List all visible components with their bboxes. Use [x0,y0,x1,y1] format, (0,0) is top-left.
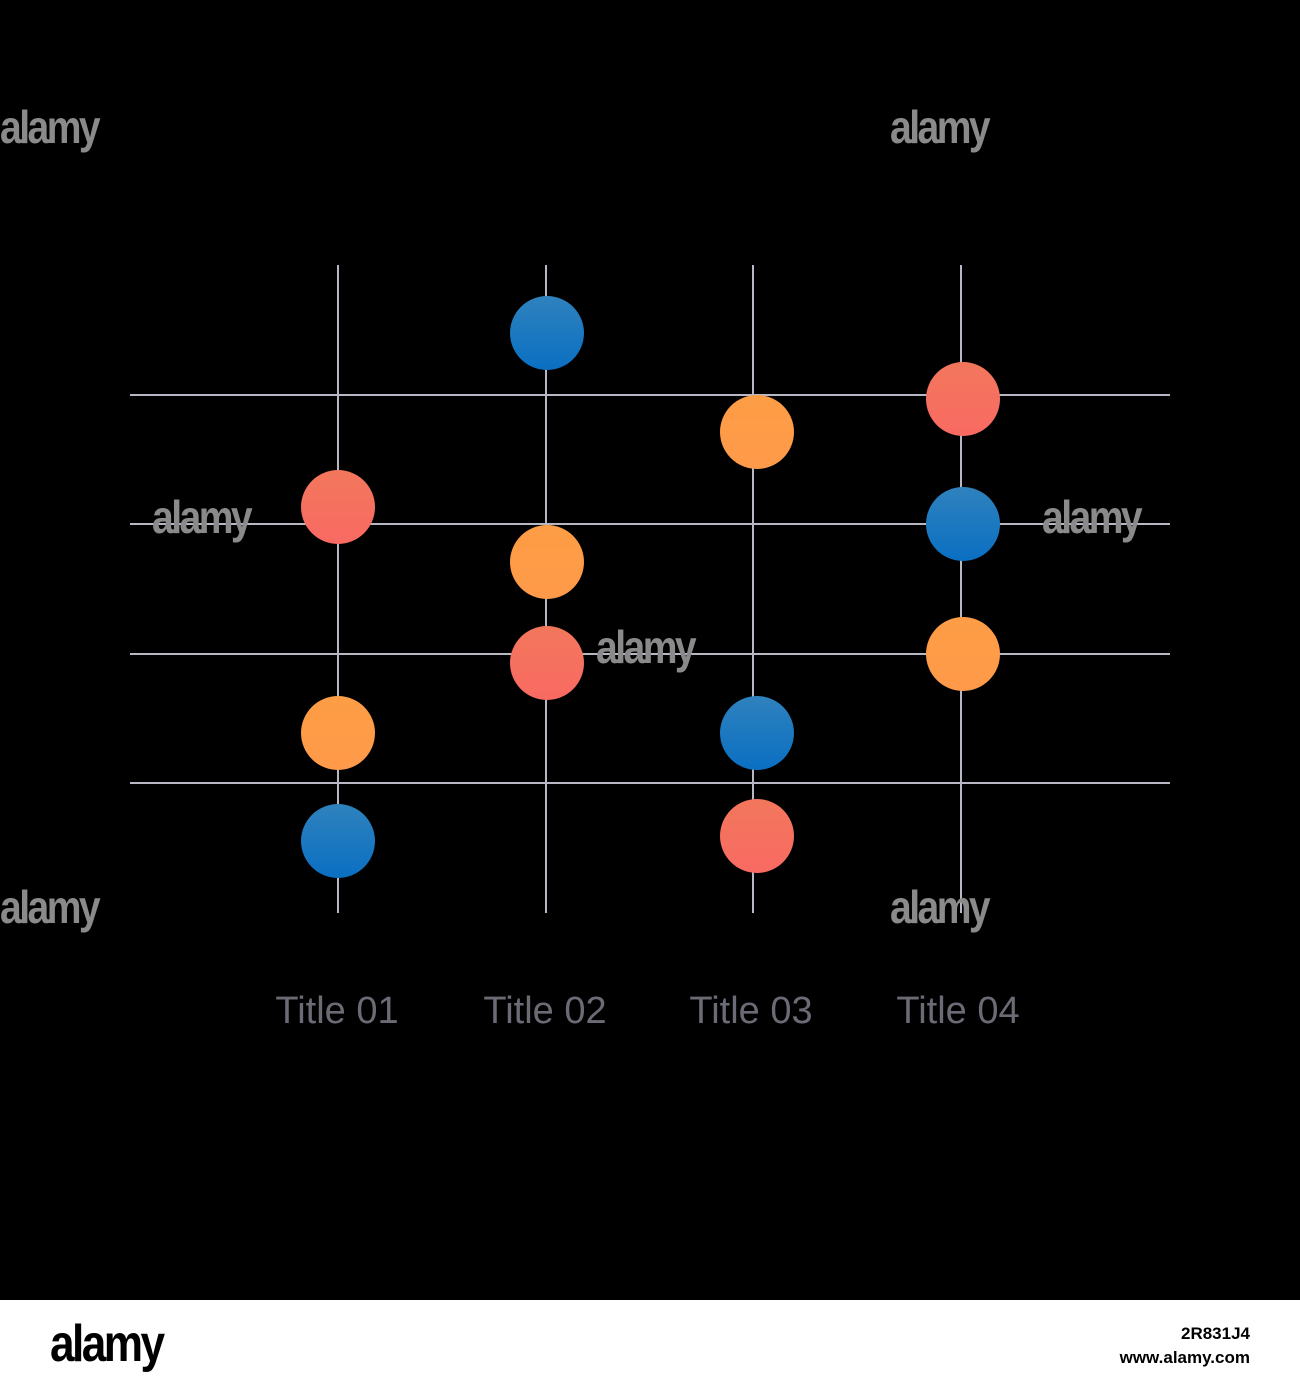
text: alamy [1042,491,1140,543]
column 2 dots [510,296,584,700]
text: alamy [890,101,988,153]
image id: 2R831J4 [1181,1324,1250,1343]
text: alamy [890,881,988,933]
text: alamy [152,491,250,543]
text: alamy [596,621,694,673]
column titles: Title 03 [689,990,813,1032]
watermarks [0,101,1142,933]
image id [1120,1324,1250,1367]
text: alamy [0,881,98,933]
column titles: Title 02 [483,990,607,1032]
logo: alamy [50,1315,163,1373]
image id: www.alamy.com [1120,1348,1250,1367]
column 1 dots [301,470,375,878]
footer bar [0,1300,1300,1390]
text: alamy [0,101,98,153]
column titles: Title 04 [896,990,1020,1032]
column titles: Title 01 [275,990,399,1032]
column titles [275,990,1020,1032]
column 3 dots [720,395,794,873]
column 4 dots [926,362,1000,691]
